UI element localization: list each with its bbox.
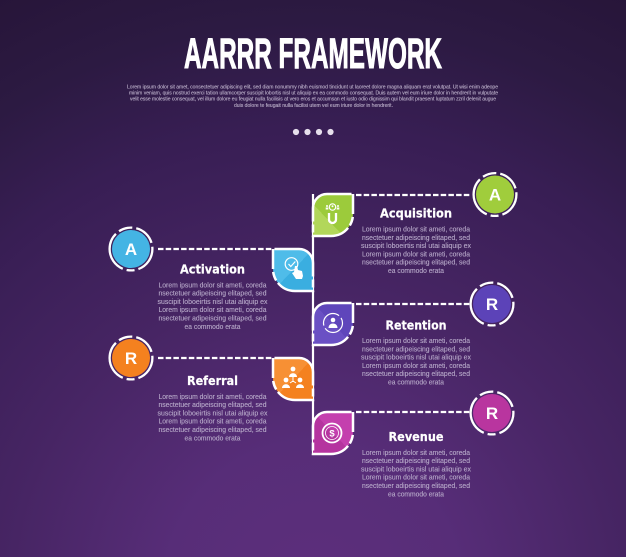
referral text bbox=[158, 392, 268, 442]
revenue text: ea commodo erata bbox=[388, 489, 445, 498]
activation card bbox=[273, 249, 313, 291]
referral text: nsectetuer adipeiscing elitaped, sed bbox=[158, 400, 266, 409]
acquisition badge: A bbox=[489, 186, 501, 204]
referral text: suscipit loboeirtis nisl utai aliquip ex bbox=[158, 408, 268, 417]
activation heading: Activation bbox=[180, 262, 245, 276]
panel: revenue bbox=[313, 392, 513, 498]
acquisition text: Lorem ipsum dolor sit ameti, coreda bbox=[362, 224, 471, 234]
retention text: Lorem ipsum dolor sit ameti, coreda bbox=[362, 361, 471, 370]
intro paragraph: Lorem ipsum dolor sit amet, consectetuer adipiscing elit, sed diam nonummy nibh euismod tincidunt ut laoreet dolore magna aliquam erat volutpat. Ut wisi enim adeope bbox=[127, 84, 498, 90]
intro paragraph: duis dolore te feugait nulla facilisi utem vel eum iriure dolor in hendrerit. bbox=[234, 103, 393, 109]
panel: retention bbox=[313, 283, 513, 386]
intro paragraph: minim veniam, quis nostrud exerci tation ullamcorper suscipit lobortis nisl ut aliquip ex ea commodo consequat. Duis autem vel eum iriure dolor in hendrerit in vulputate bbox=[129, 90, 498, 96]
retention heading: Retention bbox=[386, 318, 446, 332]
activation text: nsectetuer adipeiscing elitaped, sed bbox=[158, 289, 266, 298]
retention badge: R bbox=[486, 295, 498, 314]
retention text: nsectetuer adipeiscing elitaped, sed bbox=[362, 344, 470, 353]
retention badge bbox=[471, 283, 513, 325]
intro paragraph: velit esse molestie consequat, vel illum dolore eu feugiat nulla facilisis at vero eros et accumsan et iusto odio dignissim qui blandit praesent luptatum zzril delenit augue bbox=[130, 97, 496, 103]
connector: activation bbox=[158, 248, 272, 250]
acquisition heading: Acquisition bbox=[380, 206, 452, 220]
connector: revenue bbox=[356, 411, 470, 413]
intro paragraph bbox=[127, 84, 498, 109]
referral heading: Referral bbox=[187, 374, 238, 388]
activation badge bbox=[110, 228, 152, 270]
referral text: Lorem ipsum dolor sit ameti, coreda bbox=[158, 392, 267, 401]
acquisition badge bbox=[474, 173, 516, 216]
referral text: Lorem ipsum dolor sit ameti, coreda bbox=[158, 417, 267, 426]
revenue heading: Revenue bbox=[388, 430, 444, 444]
acquisition text: suscipit loboeirtis nisl utai aliquip ex bbox=[361, 241, 471, 250]
connector: retention bbox=[356, 303, 470, 305]
activation badge: A bbox=[125, 240, 137, 259]
revenue text: suscipit loboeirtis nisl utai aliquip ex bbox=[361, 464, 471, 473]
revenue text bbox=[361, 448, 471, 498]
acquisition text: nsectetuer adipeiscing elitaped, sed bbox=[362, 233, 470, 242]
acquisition text: ea commodo erata bbox=[388, 266, 445, 275]
activation text: Lorem ipsum dolor sit ameti, coreda bbox=[158, 280, 267, 289]
retention text: nsectetuer adipeiscing elitaped, sed bbox=[362, 369, 470, 378]
revenue text: Lorem ipsum dolor sit ameti, coreda bbox=[362, 473, 471, 482]
revenue badge bbox=[471, 392, 513, 434]
activation text bbox=[158, 280, 268, 331]
icon: people network bbox=[282, 367, 304, 388]
connector: acquisition bbox=[356, 194, 470, 196]
revenue text: nsectetuer adipeiscing elitaped, sed bbox=[362, 456, 470, 465]
activation text: nsectetuer adipeiscing elitaped, sed bbox=[158, 314, 266, 322]
referral badge: R bbox=[125, 349, 137, 368]
retention text: suscipit loboeirtis nisl utai aliquip ex bbox=[361, 353, 471, 362]
referral text: nsectetuer adipeiscing elitaped, sed bbox=[158, 425, 266, 434]
panel: acquisition bbox=[313, 173, 516, 275]
icon: magnet with people bbox=[326, 204, 339, 223]
retention text: Lorem ipsum dolor sit ameti, coreda bbox=[362, 336, 471, 345]
retention card bbox=[313, 303, 353, 345]
retention text: ea commodo erata bbox=[388, 378, 445, 386]
acquisition text: nsectetuer adipeiscing elitaped, sed bbox=[362, 258, 470, 267]
referral card bbox=[273, 358, 313, 400]
revenue text: Lorem ipsum dolor sit ameti, coreda bbox=[362, 448, 471, 457]
icon: dollar coin: $ bbox=[329, 428, 335, 440]
icon: dollar coin bbox=[322, 424, 342, 442]
activation text: Lorem ipsum dolor sit ameti, coreda bbox=[158, 305, 267, 314]
acquisition card bbox=[313, 194, 353, 236]
panel: referral bbox=[110, 337, 313, 442]
central vertical line bbox=[312, 194, 314, 455]
connector: referral bbox=[158, 357, 272, 359]
activation text: ea commodo erata bbox=[184, 322, 241, 331]
panel: activation bbox=[110, 228, 313, 331]
revenue text: nsectetuer adipeiscing elitaped, sed bbox=[362, 481, 470, 490]
icon: person in cycle bbox=[324, 314, 342, 332]
referral text: ea commodo erata bbox=[184, 433, 241, 442]
pagination dots bbox=[293, 129, 334, 135]
retention text bbox=[361, 336, 471, 386]
revenue badge: R bbox=[486, 404, 498, 423]
revenue card bbox=[313, 412, 353, 454]
icon: touch check bbox=[285, 258, 303, 279]
activation text: suscipit loboeirtis nisl utai aliquip ex bbox=[158, 297, 268, 306]
acquisition text bbox=[361, 224, 471, 275]
referral badge bbox=[110, 337, 152, 379]
acquisition text: Lorem ipsum dolor sit ameti, coreda bbox=[362, 249, 471, 258]
